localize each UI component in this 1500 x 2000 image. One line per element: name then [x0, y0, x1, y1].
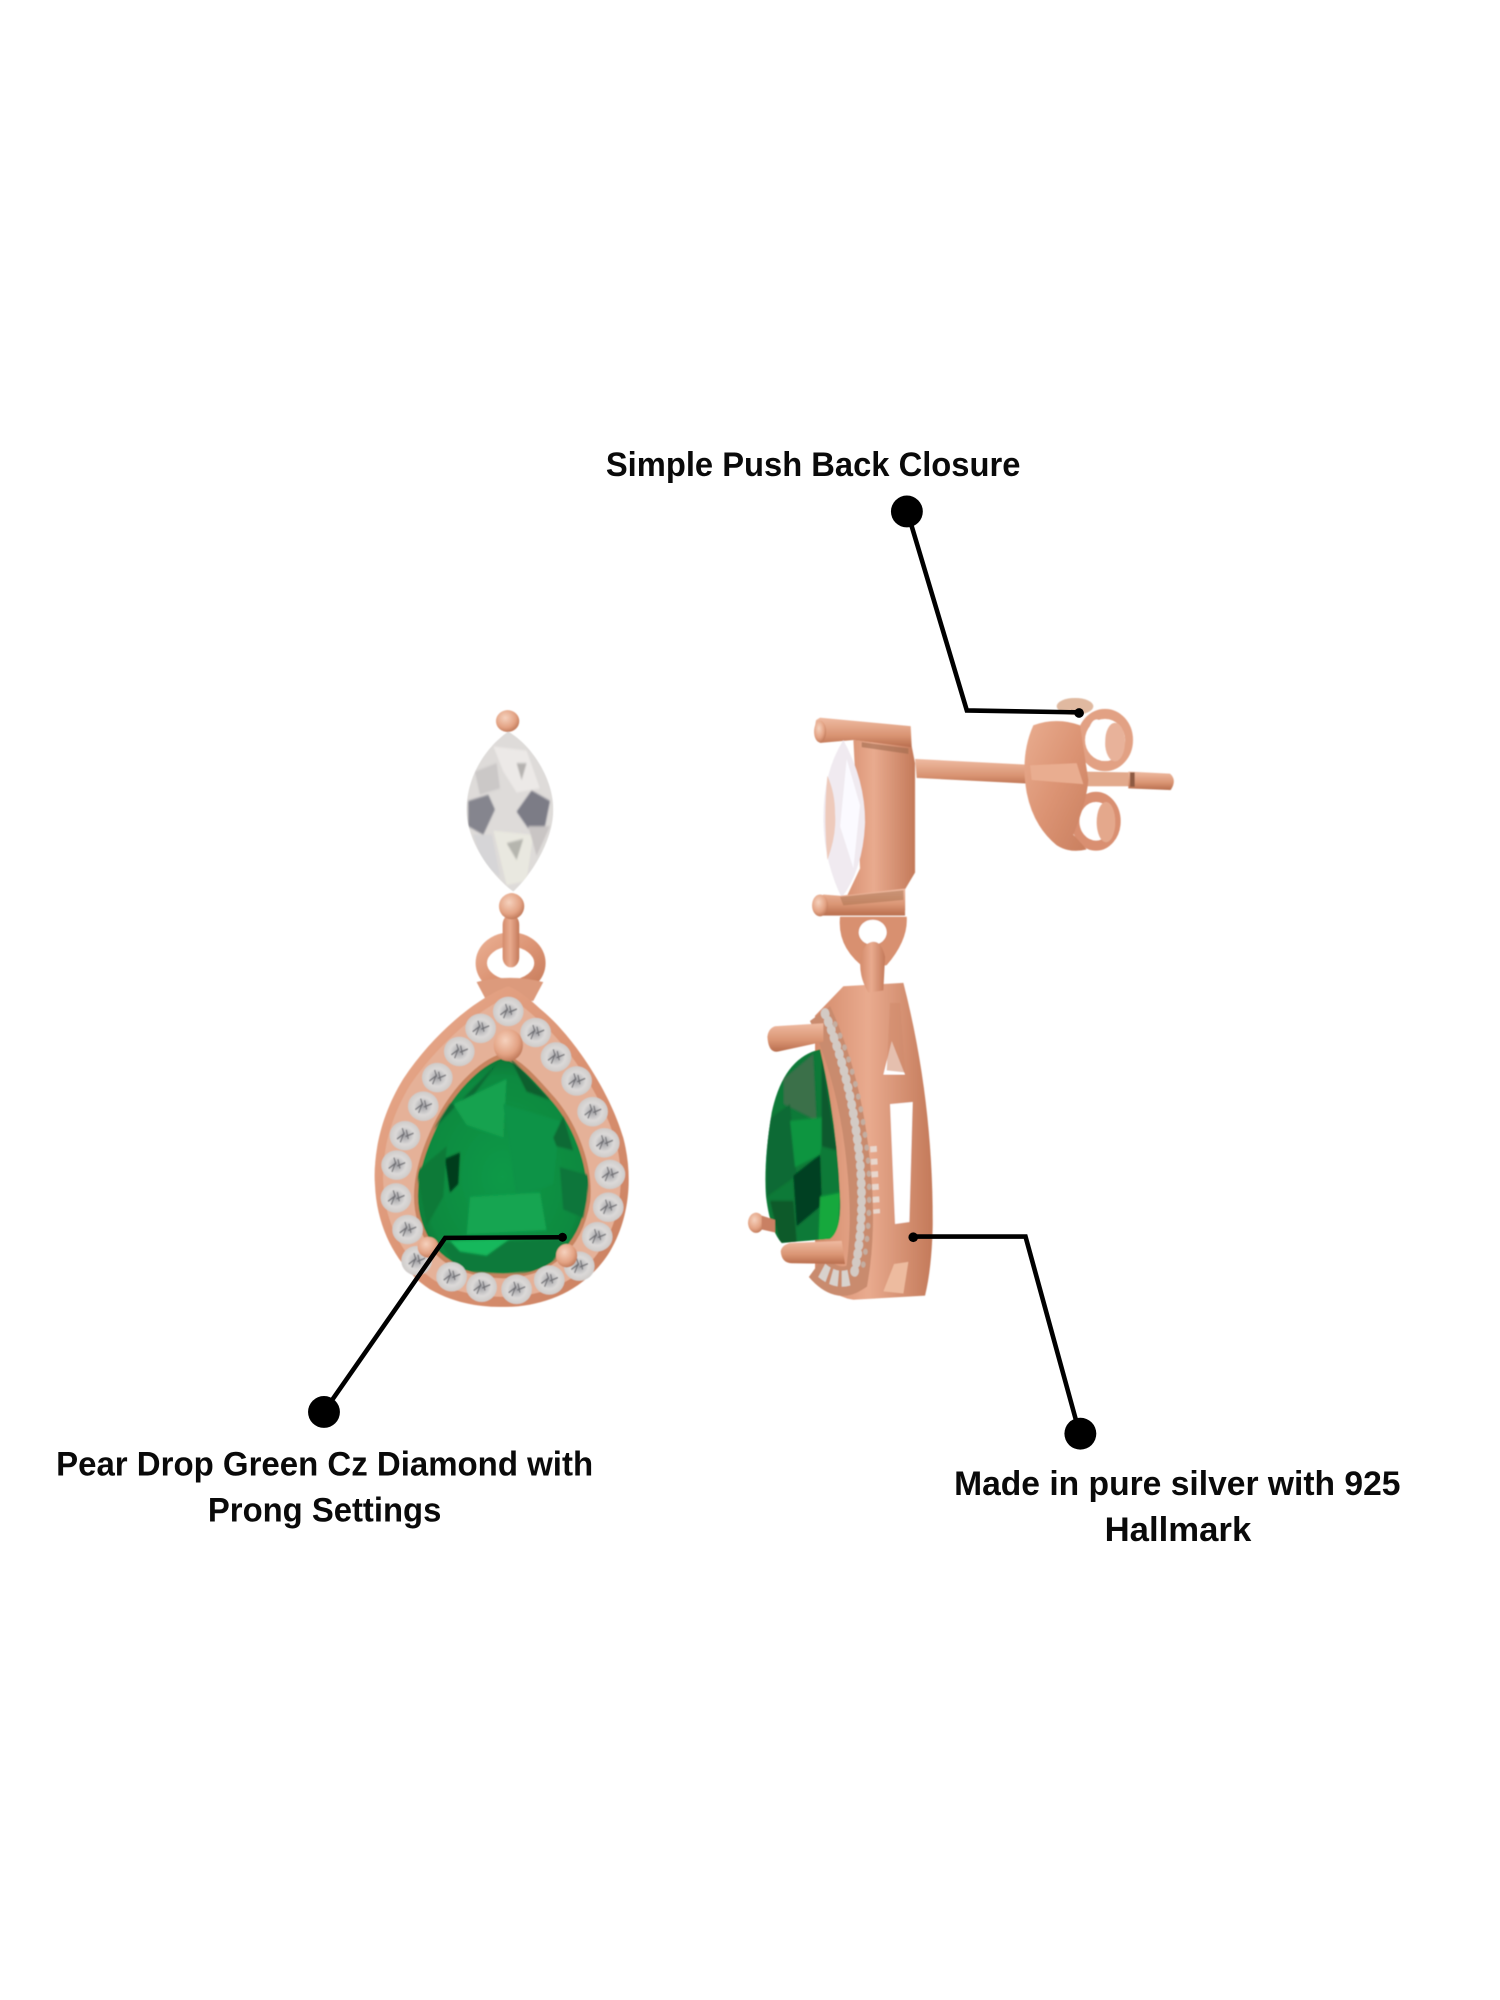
- label: Made in pure silver with 925 Hallmark: [954, 1465, 1401, 1549]
- side pave stones band: [817, 1014, 877, 1281]
- pear back frame with cut outs: [815, 983, 933, 1300]
- label: Made in pure silver with 925 Hallmark: Made in pure silver with 925: [954, 1465, 1401, 1503]
- callout: pure silver hallmark: [908, 1232, 1096, 1450]
- green gem side: [765, 1049, 840, 1243]
- connecting ring: [840, 917, 907, 969]
- earring: front view: [375, 710, 629, 1307]
- bail cap and stem: [477, 893, 543, 1001]
- label: Simple Push Back Closure: Simple Push Back Closure: [606, 446, 1020, 484]
- top prong: [496, 710, 519, 732]
- label: Made in pure silver with 925 Hallmark: Hallmark: [1105, 1511, 1251, 1549]
- connector stem: [860, 942, 885, 993]
- label: Pear Drop Green Cz Diamond with Prong Settings: [56, 1446, 593, 1530]
- stud post: [915, 759, 1174, 790]
- label: Pear Drop Green Cz Diamond with Prong Settings: Prong Settings: [208, 1492, 441, 1530]
- butterfly push back closure: [1024, 698, 1129, 851]
- callout: push back closure: [891, 496, 1084, 718]
- green pear cz gem: [416, 1056, 590, 1276]
- pear halo setting: [375, 986, 629, 1307]
- callout: pear drop gem: [308, 1233, 567, 1428]
- marquise clear stone: [467, 732, 553, 892]
- label: Pear Drop Green Cz Diamond with Prong Settings: Pear Drop Green Cz Diamond with: [56, 1446, 593, 1484]
- infographic canvas: [58, 451, 1400, 1542]
- top bezel with clear stone: [812, 718, 915, 916]
- earring: side view: [748, 698, 1174, 1300]
- halo stones: [381, 997, 625, 1304]
- side prongs: [748, 1023, 845, 1264]
- gem prongs: [418, 1029, 577, 1267]
